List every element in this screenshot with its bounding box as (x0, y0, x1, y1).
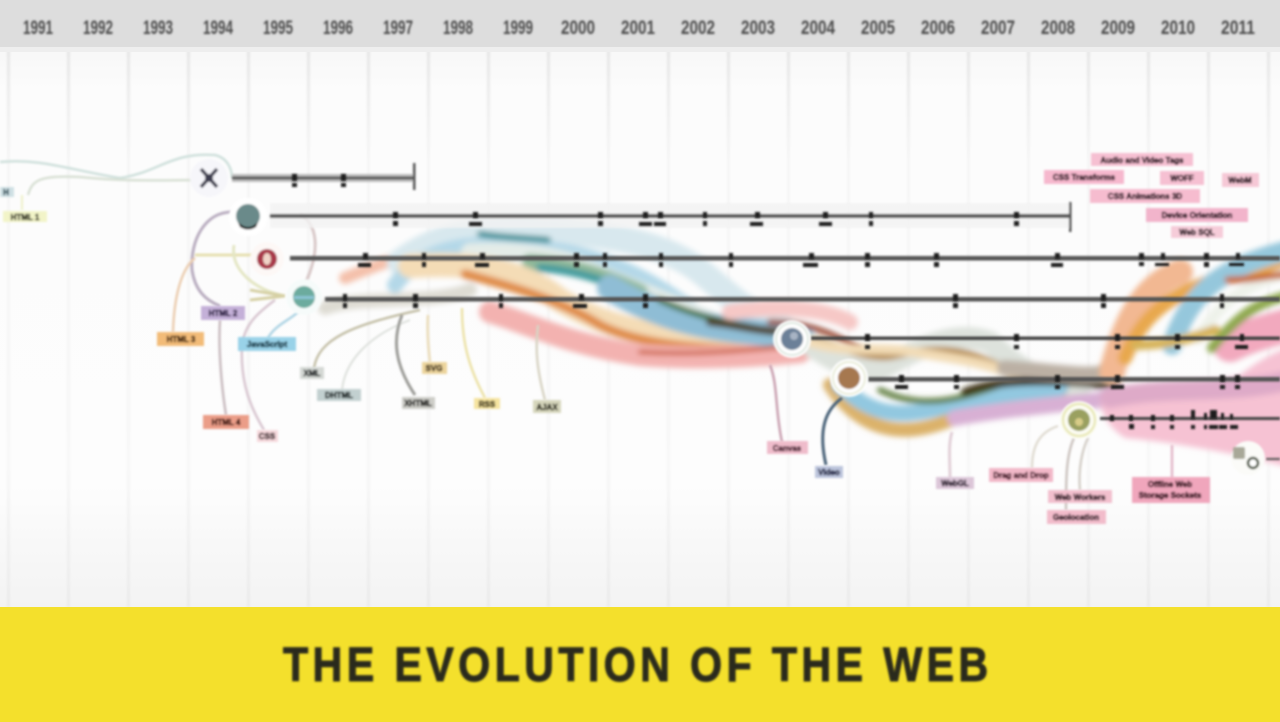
year header bar: 2002 (681, 18, 715, 39)
browser icon: Safari (773, 320, 811, 358)
technology labels: HTML5 and CSS3 features: Web SQL (1179, 228, 1215, 237)
technology labels: middle years: Geolocation (1053, 513, 1099, 522)
technology labels: HTML5 and CSS3 features (1044, 153, 1259, 238)
year header bar: 1994 (203, 18, 233, 39)
technology labels: early web: RSS (479, 400, 496, 409)
technology labels: early web: JavaScript (247, 340, 288, 349)
technology labels: early web: XML (304, 369, 321, 378)
colour ribbons: middle years (810, 338, 1120, 430)
year header bar: 2003 (741, 18, 775, 39)
technology labels: middle years: Video (818, 468, 840, 477)
technology labels: early web: SVG (426, 364, 442, 373)
year header bar: 2000 (561, 18, 595, 39)
technology labels: HTML5 and CSS3 features: Device Orientation (1162, 211, 1232, 220)
year header bar: 1999 (503, 18, 533, 39)
technology labels: middle years: WebGL (941, 479, 969, 488)
technology labels: middle years (767, 441, 1210, 524)
year header bar: 1995 (263, 18, 293, 39)
technology labels: HTML5 and CSS3 features: WebM (1228, 176, 1252, 185)
year header bar: 2001 (621, 18, 655, 39)
year header bar: 2006 (921, 18, 955, 39)
year header bar: 2009 (1101, 18, 1135, 39)
year header bar: 1998 (443, 18, 473, 39)
year header bar: 1991 (23, 18, 53, 39)
technology labels: middle years: Drag and Drop (993, 471, 1049, 480)
colour ribbons: recent years (1100, 250, 1280, 470)
year header bar: 2007 (981, 18, 1015, 39)
technology labels: middle years: Storage Sockets (1139, 491, 1202, 500)
technology labels: HTML5 and CSS3 features: CSS Animations 3D (1108, 192, 1182, 201)
technology labels: early web: HTML 3 (167, 335, 196, 344)
browser icon: Netscape (229, 198, 267, 236)
browser icon: Opera (250, 242, 284, 276)
technology labels: HTML5 and CSS3 features: WOFF (1170, 174, 1194, 183)
browser timeline bars (232, 163, 1280, 460)
year header bar: 1993 (143, 18, 173, 39)
version tick marks (292, 174, 1248, 429)
technology labels: early web: H (3, 188, 9, 197)
technology labels: early web: CSS (259, 432, 276, 441)
thin connector curves (0, 155, 1172, 510)
technology labels: middle years: Offline Web (1148, 480, 1192, 489)
technology labels: early web: XHTML (404, 399, 432, 408)
yellow title band (0, 607, 1280, 722)
year header bar: 1996 (323, 18, 353, 39)
title: THE EVOLUTION OF THE WEB (283, 638, 988, 692)
year header bar: 2008 (1041, 18, 1075, 39)
browser icon: WorldWideWeb / Mosaic (190, 159, 228, 197)
year header bar: 2004 (801, 18, 835, 39)
technology labels: early web: AJAX (536, 403, 558, 412)
colour ribbons: early web technologies (325, 229, 860, 357)
year header bar: 1992 (83, 18, 113, 39)
technology labels: early web (0, 187, 561, 442)
browser icon: Chrome OS / Web Store (1231, 441, 1265, 475)
browser icon: Firefox (830, 359, 868, 397)
technology labels: early web: HTML 2 (209, 309, 238, 318)
technology labels: HTML5 and CSS3 features: Audio and Video Tags (1100, 156, 1184, 165)
technology labels: early web: HTML 1 (11, 213, 40, 222)
browser icon: Internet Explorer (286, 279, 322, 315)
technology labels: early web: HTML 4 (212, 418, 241, 427)
year header bar: 2011 (1221, 18, 1255, 39)
year header bar (0, 0, 1280, 52)
year header bar: 1997 (383, 18, 413, 39)
technology labels: HTML5 and CSS3 features: CSS Transforms (1053, 173, 1116, 182)
technology labels: middle years: Web Workers (1055, 493, 1106, 502)
year header bar: 2005 (861, 18, 895, 39)
year header bar: 2010 (1161, 18, 1195, 39)
browser icon: Chrome (1060, 401, 1098, 439)
technology labels: early web: DHTML (325, 391, 353, 400)
technology labels: middle years: Canvas (773, 444, 802, 453)
